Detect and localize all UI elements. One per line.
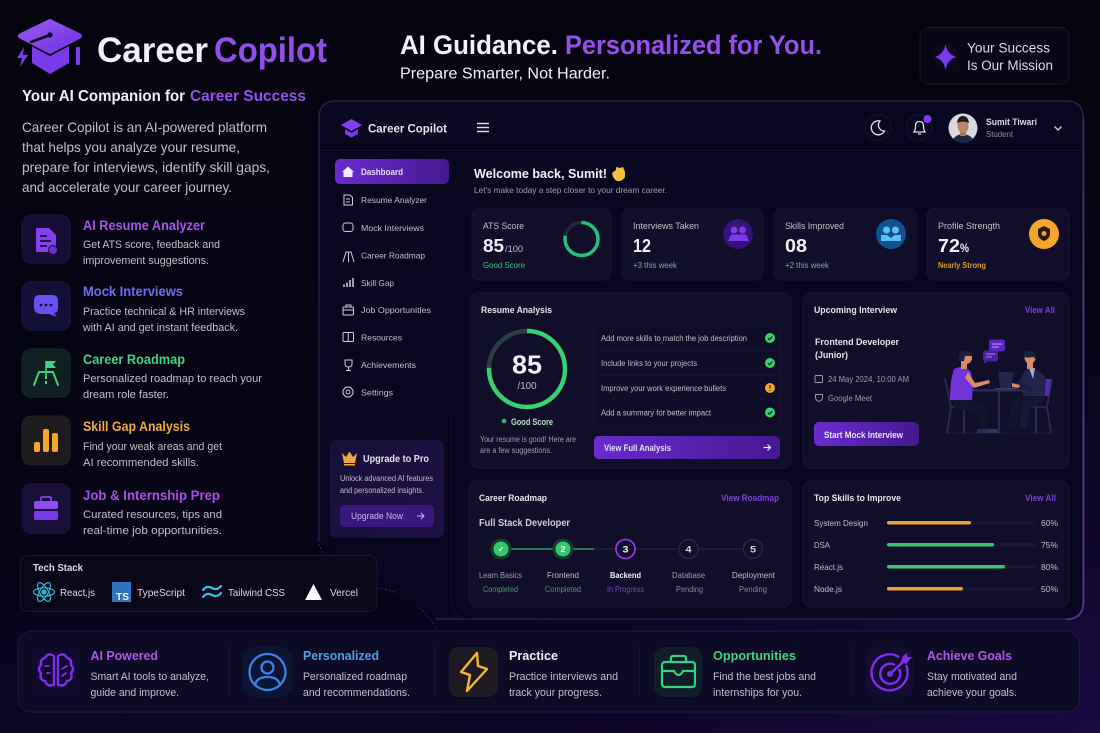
panel: resume analysis: are a few suggestions. xyxy=(480,446,552,455)
header headline: Prepare Smarter, Not Harder. xyxy=(400,66,610,82)
suggestions list: Add more skills to match the job description xyxy=(601,334,747,343)
sidebar navigation: Mock Interviews xyxy=(361,223,424,233)
stat card: skills improved: Skills Improved xyxy=(785,221,844,231)
sidebar navigation: Settings xyxy=(361,388,393,398)
panel: career roadmap: Career Roadmap xyxy=(479,493,547,504)
feature: Skill Gap Analysis: Find your weak areas and get xyxy=(83,441,223,453)
mission badge: Your Success xyxy=(967,40,1050,56)
illustration: interview scene xyxy=(945,340,1052,433)
feature: AI Resume Analyzer xyxy=(22,215,220,267)
panel: career roadmap: Pending xyxy=(739,584,767,594)
roadmap stepper xyxy=(490,538,762,560)
icon: React xyxy=(34,581,54,603)
sidebar navigation: Career Roadmap xyxy=(361,250,425,260)
benefit: Personalized: Personalized xyxy=(303,648,379,663)
panel: career roadmap: Full Stack Developer xyxy=(479,518,570,529)
start mock interview button: Start Mock Interview xyxy=(824,430,904,440)
panel: top skills to improve: 60% xyxy=(1041,518,1058,528)
stat card: interviews taken xyxy=(622,209,763,280)
panel: resume analysis: Your resume is good! Here are xyxy=(480,435,576,444)
panel: upcoming interview: 24 May 2024, 10:00 AM xyxy=(828,375,909,384)
panel: top skills to improve: Node.js xyxy=(814,584,842,594)
bottom benefits bar xyxy=(18,631,1080,712)
view full analysis button: View Full Analysis xyxy=(604,443,671,453)
tech stack panel xyxy=(20,556,377,612)
benefit: Practice xyxy=(449,647,618,699)
upgrade card: Upgrade Now xyxy=(351,511,403,521)
panel: career roadmap: Frontend xyxy=(547,570,579,580)
panel: career roadmap: Backend xyxy=(610,570,641,580)
benefit: Achieve Goals: Stay motivated and xyxy=(927,671,1017,683)
benefit: Practice: track your progress. xyxy=(509,687,602,699)
benefit: Opportunities xyxy=(654,647,816,699)
panel: top skills to improve: View All xyxy=(1025,493,1056,503)
feature: Mock Interviews: Practice technical & HR interviews xyxy=(83,306,245,318)
panel: upcoming interview: Upcoming Interview xyxy=(814,305,898,316)
stat card: ATS score: ATS Score xyxy=(483,221,524,231)
title: Career Copilot: Copilot xyxy=(214,30,327,70)
start mock interview button xyxy=(814,422,919,446)
benefit: Practice: Practice interviews and xyxy=(509,671,618,683)
welcome heading: Welcome back, Sumit! xyxy=(474,166,607,181)
panel: upcoming interview: Google Meet xyxy=(828,394,873,403)
header headline: Personalized for You. xyxy=(565,30,822,60)
feature: Mock Interviews: with AI and get instant feedback. xyxy=(82,322,238,334)
feature: Career Roadmap xyxy=(22,349,262,401)
feature: Job & Internship Prep: real-time job opportunities. xyxy=(83,525,222,537)
icon: TypeScript: TS xyxy=(116,592,129,603)
benefit: Achieve Goals: Achieve Goals xyxy=(927,648,1012,663)
sidebar navigation: Job Opportunities xyxy=(361,305,431,315)
benefit: Personalized: and recommendations. xyxy=(303,687,410,699)
panel: top skills to improve: System Design xyxy=(814,518,868,528)
top bar: theme, notification and user xyxy=(865,113,1062,143)
panel: upcoming interview: View All xyxy=(1025,305,1055,315)
panel: career roadmap: Database xyxy=(672,570,705,580)
stat card: skills improved: +2 this week xyxy=(785,260,830,270)
stat card: ATS score xyxy=(472,209,611,280)
benefit: AI Powered: AI Powered xyxy=(90,648,158,663)
score ring xyxy=(489,331,565,407)
tech stack panel: TypeScript xyxy=(137,587,185,599)
roadmap stepper: ✓ xyxy=(498,545,504,554)
tech stack panel: Vercel xyxy=(330,587,358,599)
roadmap stepper: 3 xyxy=(622,544,628,556)
roadmap stepper: 2 xyxy=(560,545,566,554)
panel: career roadmap: Learn Basics xyxy=(479,570,522,580)
feature: Skill Gap Analysis xyxy=(22,416,223,469)
panel: top skills to improve xyxy=(803,481,1069,607)
feature: Career Roadmap: Career Roadmap xyxy=(83,352,185,367)
sidebar navigation: Skill Gap xyxy=(361,278,394,288)
stat card: profile strength: Nearly Strong xyxy=(938,260,986,270)
panel: resume analysis xyxy=(470,293,791,468)
tagline: Career Success xyxy=(190,88,306,105)
stat card: interviews taken: 12 xyxy=(633,236,651,256)
stat card: ATS score: 85 xyxy=(483,236,504,256)
sidebar navigation: Achievements xyxy=(361,360,416,370)
feature: AI Resume Analyzer: Get ATS score, feedback and xyxy=(83,239,220,251)
benefit: Personalized: Personalized roadmap xyxy=(303,671,407,683)
logo: graduation cap xyxy=(17,18,83,74)
panel: top skills to improve: DSA xyxy=(814,540,830,550)
feature: Career Roadmap: dream role faster. xyxy=(83,389,169,401)
feature: Career Roadmap: Personalized roadmap to reach your xyxy=(83,373,262,385)
title: Career Copilot: Career xyxy=(97,30,208,70)
feature: Skill Gap Analysis: AI recommended skills. xyxy=(83,457,199,469)
icon: Tailwind xyxy=(203,586,221,597)
panel: career roadmap: In Progress xyxy=(607,584,644,594)
score ring: 85 xyxy=(512,350,542,380)
title: Career Copilot xyxy=(97,30,327,70)
panel: career roadmap: Completed xyxy=(545,584,581,594)
roadmap stepper: 5 xyxy=(750,544,757,556)
sidebar navigation xyxy=(335,159,449,398)
sidebar navigation: Resume Analyzer xyxy=(361,195,427,205)
panel: top skills to improve: 80% xyxy=(1041,562,1058,572)
upgrade card: and personalized insights. xyxy=(340,486,424,495)
stat card: interviews taken: +3 this week xyxy=(633,260,678,270)
stat card: skills improved: 08 xyxy=(785,236,807,256)
dashboard logo and menu xyxy=(341,119,489,138)
panel: upcoming interview: Frontend Developer xyxy=(815,337,899,348)
stat card: profile strength: Profile Strength xyxy=(938,221,1000,231)
tech stack panel: Tech Stack xyxy=(33,562,83,574)
feature: Job & Internship Prep xyxy=(22,484,222,537)
tech stack panel: Tailwind CSS xyxy=(228,587,285,599)
view full analysis button xyxy=(594,436,780,459)
feature: Mock Interviews: Mock Interviews xyxy=(83,284,183,299)
intro paragraph: and accelerate your career journey. xyxy=(22,179,232,195)
stat card: ATS score: /100 xyxy=(505,244,523,255)
sidebar navigation: Dashboard xyxy=(361,167,403,177)
dashboard panel xyxy=(319,101,1084,620)
upgrade card: Upgrade to Pro xyxy=(363,454,429,465)
welcome heading: Let's make today a step closer to your dream career. xyxy=(474,185,667,195)
icon: TypeScript xyxy=(112,582,131,603)
intro paragraph: Career Copilot is an AI-powered platform xyxy=(22,119,267,135)
suggestions list: Improve your work experience bullets xyxy=(601,384,726,393)
benefit: Achieve Goals: achieve your goals. xyxy=(927,687,1017,699)
panel: top skills to improve: 50% xyxy=(1041,584,1058,594)
upgrade card xyxy=(330,440,444,538)
benefit: AI Powered xyxy=(32,647,209,699)
panel: top skills to improve: Top Skills to Improve xyxy=(814,493,901,504)
suggestions list: Add a summary for better impact xyxy=(601,408,712,418)
stat card: profile strength: % xyxy=(960,241,969,255)
feature: AI Resume Analyzer: AI Resume Analyzer xyxy=(83,218,206,233)
stat card: skills improved xyxy=(774,209,916,280)
tagline: Your AI Companion for xyxy=(22,88,185,105)
feature: Mock Interviews xyxy=(22,282,245,334)
intro paragraph: that helps you analyze your resume, xyxy=(22,139,240,155)
welcome heading xyxy=(474,166,667,195)
panel: resume analysis: Good Score xyxy=(511,417,553,427)
mission badge xyxy=(920,28,1069,84)
benefit: Achieve Goals xyxy=(866,647,1017,699)
panel: top skills to improve: React.js xyxy=(814,562,843,572)
tagline xyxy=(22,88,306,105)
score ring: /100 xyxy=(518,381,537,392)
suggestions list: Include links to your projects xyxy=(601,359,697,368)
skill bars xyxy=(887,521,1035,590)
panel: career roadmap xyxy=(469,481,791,607)
benefit: Opportunities: Find the best jobs and xyxy=(713,671,816,683)
top bar: theme, notification and user: Student xyxy=(986,130,1014,139)
panel: career roadmap: Pending xyxy=(676,584,703,594)
panel: career roadmap: Deployment xyxy=(732,570,776,580)
feature: Skill Gap Analysis: Skill Gap Analysis xyxy=(83,419,190,434)
benefit: Opportunities: Opportunities xyxy=(713,648,796,663)
top bar: theme, notification and user: Sumit Tiwari xyxy=(986,117,1037,127)
stat card: profile strength: 72 xyxy=(938,236,960,256)
panel: resume analysis: Resume Analysis xyxy=(481,305,552,316)
stat card: ATS score: Good Score xyxy=(483,260,525,270)
header headline xyxy=(400,30,822,82)
panel: career roadmap: Completed xyxy=(483,584,518,594)
intro paragraph xyxy=(22,119,270,195)
icon: Vercel xyxy=(305,584,322,600)
stat card: profile strength xyxy=(927,209,1069,280)
header headline: AI Guidance. xyxy=(400,30,558,60)
panel: career roadmap: View Roadmap xyxy=(721,493,779,503)
feature: Job & Internship Prep: Job & Internship Prep xyxy=(83,488,220,503)
benefit: AI Powered: Smart AI tools to analyze, xyxy=(90,671,209,683)
benefit: Personalized xyxy=(243,647,410,699)
tech stack panel: React.js xyxy=(60,587,95,599)
intro paragraph: prepare for interviews, identify skill gaps, xyxy=(22,159,270,175)
mission badge: Is Our Mission xyxy=(967,58,1053,73)
panel: upcoming interview: (Junior) xyxy=(815,350,848,361)
feature: AI Resume Analyzer: improvement suggestions. xyxy=(83,255,209,267)
benefit: Practice: Practice xyxy=(509,648,558,663)
panel: top skills to improve: 75% xyxy=(1041,540,1058,550)
sidebar navigation: Resources xyxy=(361,332,402,342)
feature: Job & Internship Prep: Curated resources, tips and xyxy=(83,509,222,521)
stat card: interviews taken: Interviews Taken xyxy=(633,221,699,231)
benefit: AI Powered: guide and improve. xyxy=(90,687,179,699)
panel: upcoming interview xyxy=(803,293,1069,468)
roadmap stepper: 4 xyxy=(686,544,692,556)
suggestions list xyxy=(594,326,780,425)
dashboard logo and menu: Career Copilot xyxy=(368,122,447,136)
benefit: Opportunities: internships for you. xyxy=(713,687,802,699)
upgrade card: Unlock advanced AI features xyxy=(340,474,433,483)
dotted connector lines xyxy=(318,540,437,630)
